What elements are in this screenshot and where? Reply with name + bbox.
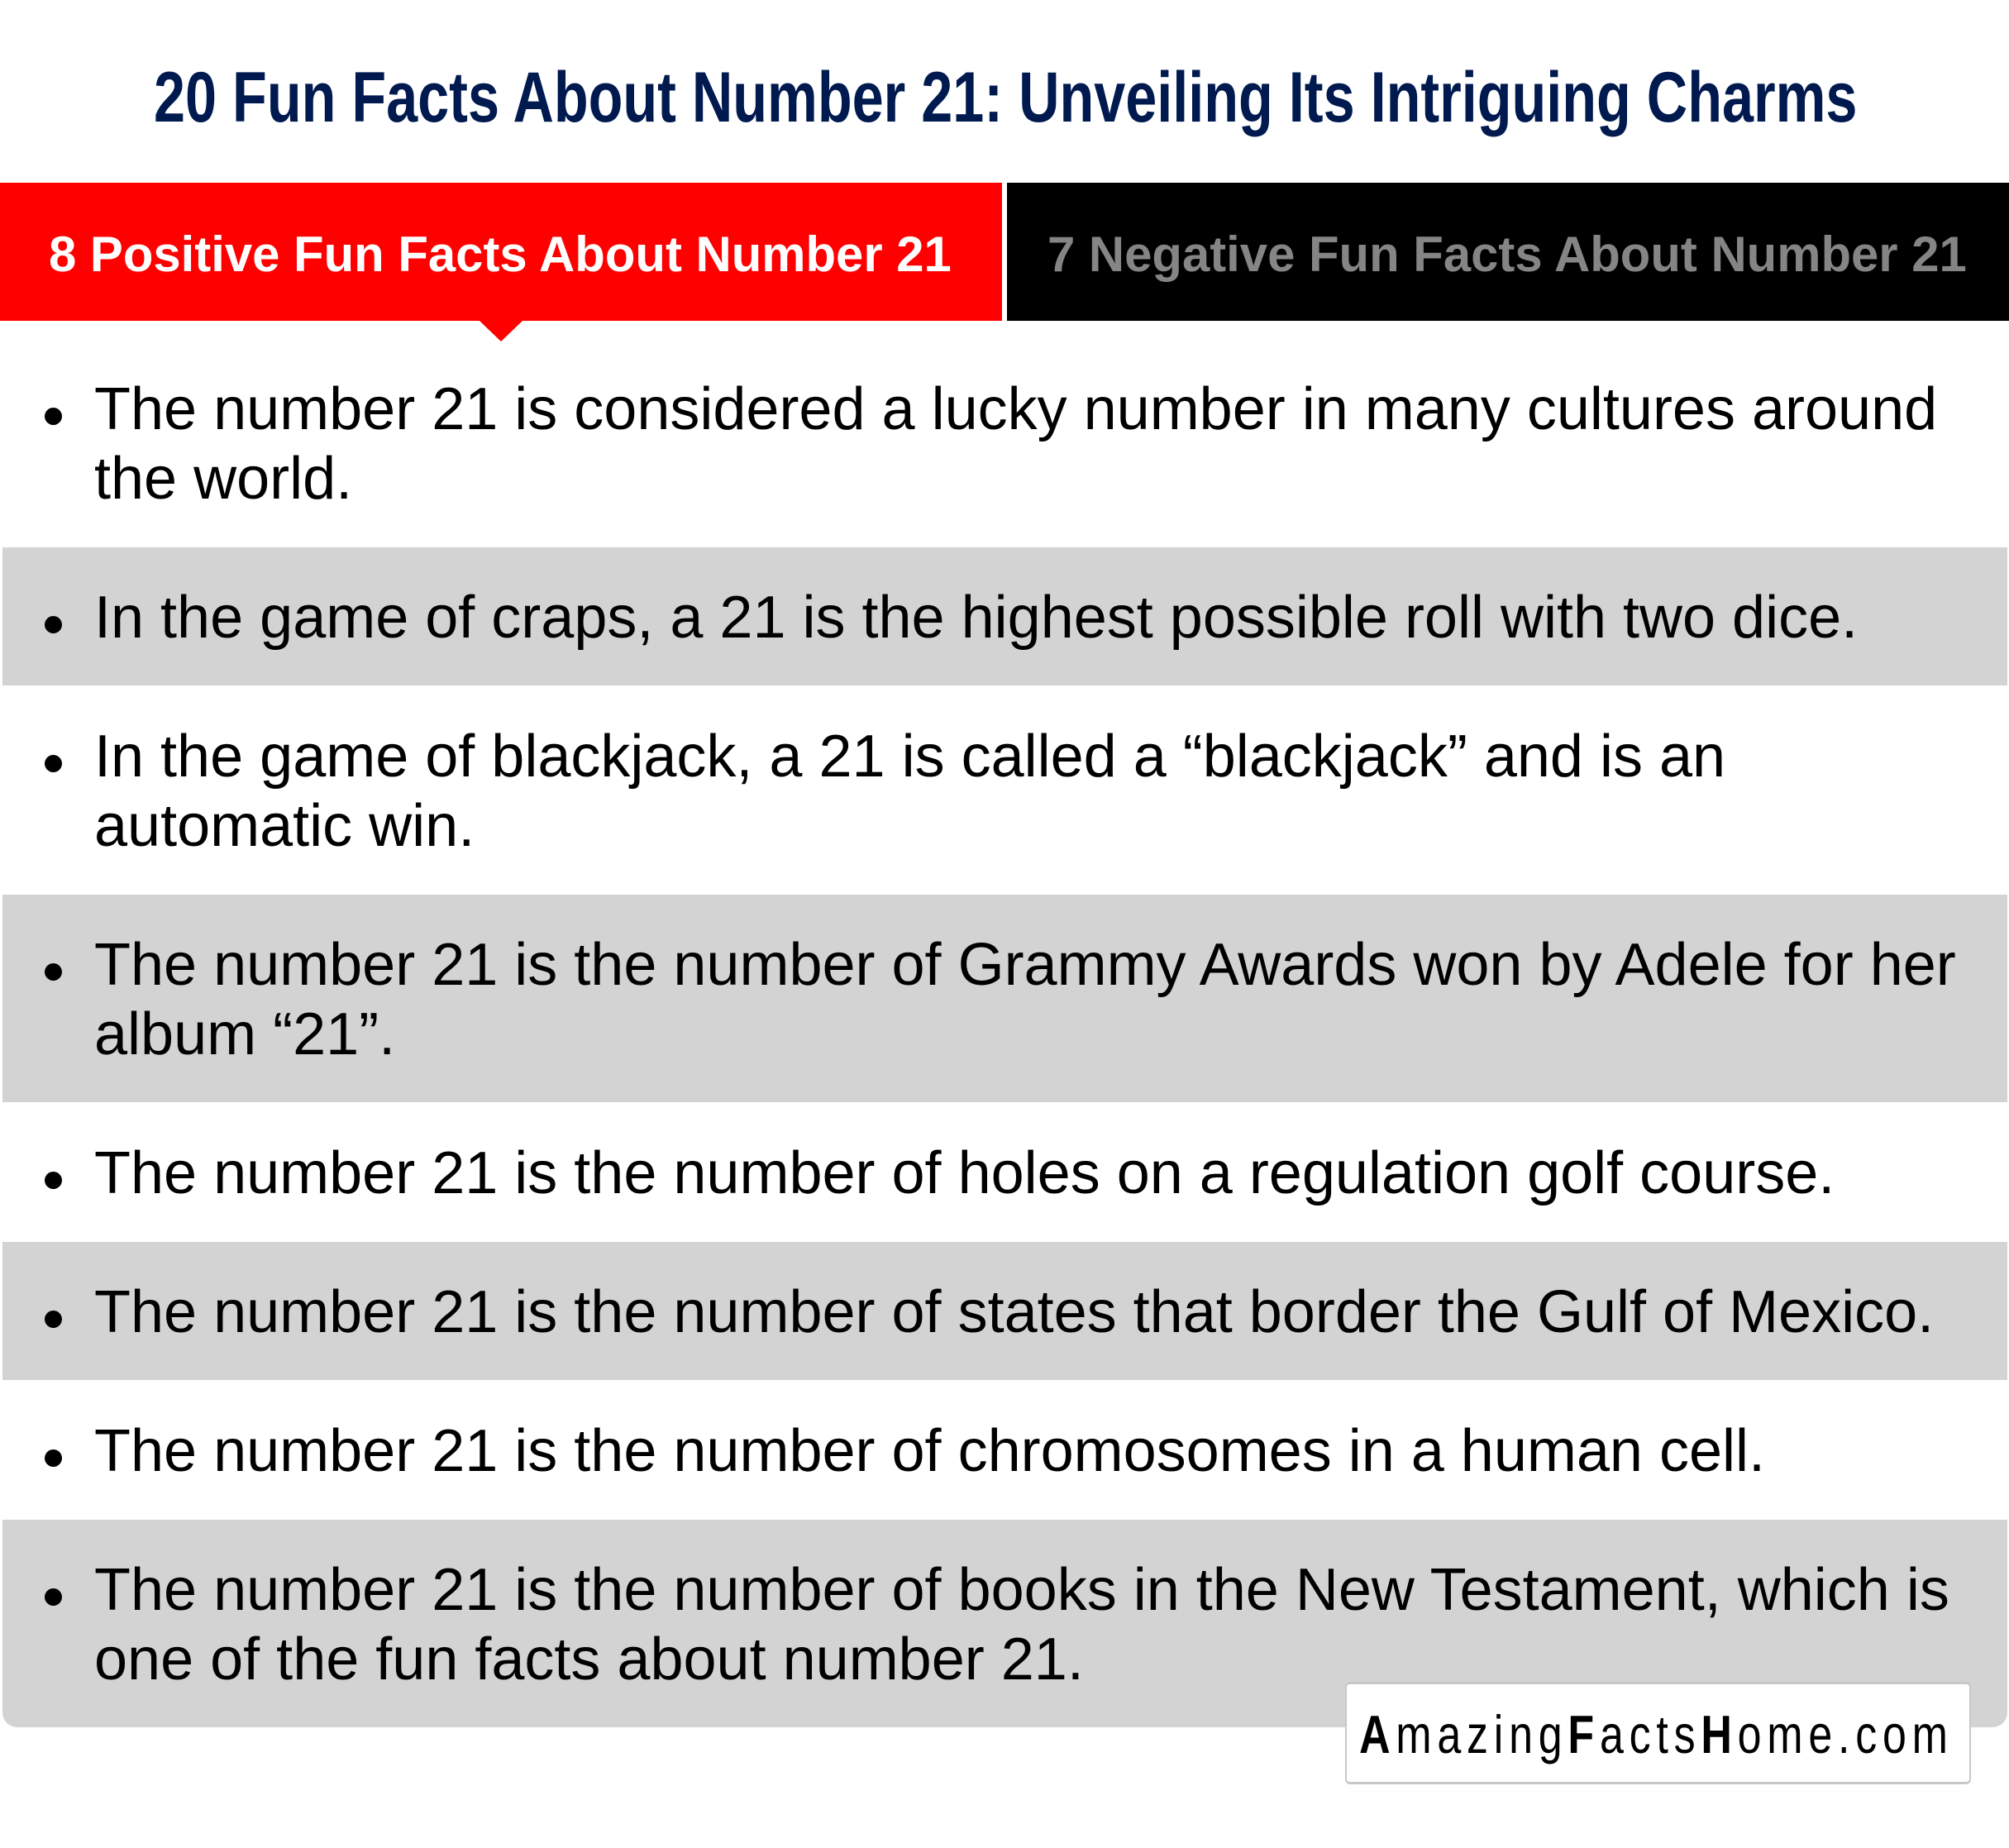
fact text: album “21”. — [94, 1001, 395, 1067]
bullet — [45, 1172, 62, 1189]
fact 6 — [2, 1242, 2007, 1380]
fact text: The number 21 is the number of holes on a regulation golf course. — [94, 1140, 1835, 1206]
bullet — [45, 1588, 62, 1606]
fact 8 — [2, 1520, 2007, 1727]
fact text: The number 21 is the number of chromosomes in a human cell. — [94, 1418, 1765, 1484]
tab: negative facts — [1007, 183, 2009, 321]
fact text: The number 21 is the number of states that border the Gulf of Mexico. — [94, 1279, 1934, 1345]
fact text: In the game of blackjack, a 21 is called a “blackjack” and is an — [94, 723, 1725, 790]
fact text: The number 21 is the number of Grammy Awards won by Adele for her — [94, 932, 1956, 998]
fact text — [94, 932, 1956, 1067]
fact text — [94, 1557, 1949, 1693]
watermark text: AmazingFactsHome.com — [1359, 1706, 1948, 1764]
bullet — [45, 755, 62, 772]
tab: positive facts — [0, 183, 1002, 341]
fact 3 — [45, 723, 1725, 859]
fact text: The number 21 is considered a lucky number in many cultures around — [94, 376, 1937, 442]
fact text: The number 21 is the number of books in the New Testament, which is — [94, 1557, 1949, 1623]
fact text: In the game of craps, a 21 is the highest possible roll with two dice. — [94, 585, 1858, 651]
tab label: 8 Positive Fun Facts About Number 21 — [49, 227, 952, 282]
tab label: 7 Negative Fun Facts About Number 21 — [1047, 227, 1967, 282]
tab background — [0, 183, 1002, 321]
fact 5 — [45, 1140, 1835, 1206]
bullet — [45, 408, 62, 425]
fact text — [94, 723, 1725, 859]
fact text: the world. — [94, 446, 352, 512]
fact text — [94, 376, 1937, 512]
bullet — [45, 616, 62, 633]
fact 7 — [45, 1418, 1765, 1484]
watermark badge — [1345, 1682, 1971, 1784]
title: 20 Fun Facts About Number 21: Unveiling Its Intriguing Charms — [154, 59, 1857, 137]
fact 2 — [2, 547, 2007, 685]
fact 4 — [2, 895, 2007, 1102]
fact 1 — [45, 376, 1937, 512]
fact text: one of the fun facts about number 21. — [94, 1626, 1084, 1693]
bullet — [45, 1311, 62, 1328]
bullet — [45, 1449, 62, 1467]
tab pointer — [480, 321, 523, 341]
bullet — [45, 963, 62, 981]
fact text: automatic win. — [94, 793, 475, 859]
